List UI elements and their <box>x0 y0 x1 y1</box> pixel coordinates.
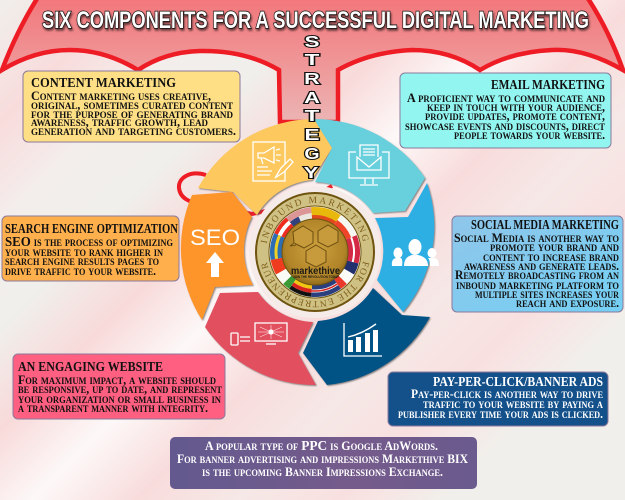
body text: publisher every time your ads is clicked. <box>398 407 603 421</box>
icon: responsive website <box>231 323 287 345</box>
body text: people towards your website. <box>454 128 605 142</box>
note text: is the upcoming Banner Impressions Exchange. <box>202 465 443 479</box>
note text: A popular type of PPC is Google AdWords. <box>205 439 438 454</box>
body text: original, sometimes curated content <box>31 98 233 112</box>
body text: Pay-per-click is another way to drive <box>411 387 603 401</box>
panel: ppc note <box>170 437 477 489</box>
body text: For maximum impact, a website should <box>18 373 216 387</box>
strategy vertical text: A <box>304 90 320 107</box>
panel: an engaging website <box>13 354 225 419</box>
body text: keep in touch with your audience, <box>427 100 605 114</box>
strategy vertical text: S <box>304 33 320 51</box>
body text: be responsive, up to date, and represent <box>18 382 222 396</box>
segment: website <box>205 292 316 385</box>
body text: for the purpose of generating brand <box>31 107 233 121</box>
body text: reach and exposure. <box>516 296 619 310</box>
body text: provide updates, promote content, <box>425 109 605 123</box>
panel: email marketing <box>400 73 611 148</box>
strategy vertical text <box>304 33 320 182</box>
panel: search engine optimization <box>2 216 179 281</box>
body text: awareness, traffic growth, lead <box>31 115 208 129</box>
icon: seo <box>190 225 240 277</box>
icon: content marketing <box>253 142 293 181</box>
panel: social media marketing <box>452 216 623 312</box>
note text: For banner advertising and impressions Markethive BIX <box>177 452 468 466</box>
panel: content marketing <box>23 71 240 142</box>
text: inbound marketing: INBOUND MARKETING <box>260 196 368 244</box>
body text: SEO is the process of optimizing <box>5 235 173 250</box>
icon: email <box>349 145 389 185</box>
body text: showcase events and discounts, direct <box>405 119 605 133</box>
heading: CONTENT MARKETING <box>31 76 176 91</box>
text: markethive: markethive <box>291 266 340 277</box>
icon: bar chart <box>344 323 382 356</box>
strategy vertical text: R <box>304 71 320 88</box>
strategy vertical text: E <box>304 126 320 144</box>
panel: pay-per-click <box>388 372 608 426</box>
body text <box>454 231 619 310</box>
strategy vertical text: T <box>305 52 320 69</box>
body text: traffic to your website by paying a <box>423 397 603 411</box>
note text <box>177 439 468 479</box>
strategy wheel <box>181 119 434 385</box>
body text <box>31 89 236 138</box>
text: for the entrepreneur: FOR THE ENTREPRENEUR <box>262 261 370 308</box>
segment: social media <box>375 183 434 312</box>
segment: pay per click <box>303 288 430 385</box>
strategy vertical text: G <box>304 145 320 163</box>
body text: a transparent manner with integrity. <box>18 401 208 415</box>
icon: people <box>392 239 439 266</box>
text: tagline: JOIN THE REVOLUTION TODAY <box>293 275 340 279</box>
body text: Social Media is another way to <box>454 231 619 245</box>
body text: drive traffic to your website. <box>5 264 156 278</box>
icon: seo: SEO <box>190 225 240 250</box>
segment: content marketing <box>198 119 332 215</box>
body text <box>5 235 173 278</box>
body text: A proficient way to communicate and <box>407 91 605 105</box>
heading: AN ENGAGING WEBSITE <box>18 360 163 375</box>
medallion <box>250 187 381 318</box>
umbrella handle hook <box>179 173 332 214</box>
segment: seo <box>181 192 253 320</box>
strategy vertical text: Y <box>304 165 319 182</box>
body text <box>398 387 603 421</box>
body text <box>405 91 605 142</box>
umbrella canopy <box>2 0 623 122</box>
body text <box>18 373 222 415</box>
body text: Content marketing uses creative, <box>31 89 211 103</box>
body text: generation and targeting customers. <box>31 124 236 138</box>
body text: your website to rank higher in <box>5 245 163 259</box>
body text: your organization or small business in <box>18 392 221 406</box>
body text: content to increase brand <box>483 250 619 264</box>
body text: search engine results pages to <box>5 254 159 268</box>
body text: inbound marketing platform to <box>456 278 619 292</box>
strategy vertical text: T <box>305 108 320 125</box>
body text: promote your brand and <box>490 240 619 254</box>
heading: SEARCH ENGINE OPTIMIZATION <box>5 222 178 237</box>
hexagon logo <box>290 225 338 267</box>
segment: email marketing <box>314 119 425 213</box>
flags ring <box>256 193 374 311</box>
